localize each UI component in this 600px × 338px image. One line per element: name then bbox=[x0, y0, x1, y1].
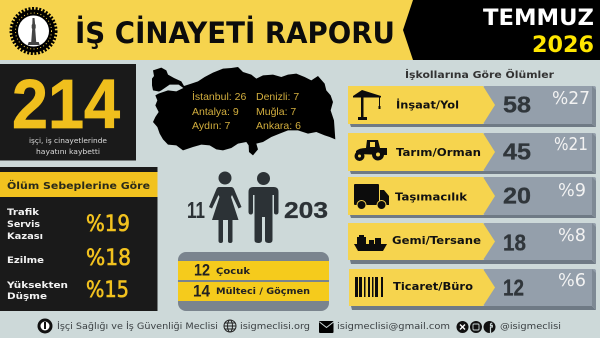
icon: mail bbox=[319, 321, 334, 333]
month: TEMMUZ bbox=[483, 6, 594, 31]
children row: 12 bbox=[194, 260, 210, 280]
province figures: Denizli: 7 bbox=[256, 91, 299, 103]
cause: crushing: %18 bbox=[86, 246, 131, 271]
total caption bbox=[29, 137, 107, 156]
cause: fall from height bbox=[6, 278, 129, 303]
sector row: construction: %27 bbox=[552, 88, 590, 109]
sector heading: İşkollarına Göre Ölümler bbox=[405, 70, 554, 81]
sector row: trade: 12 bbox=[503, 274, 524, 300]
cause: traffic: %19 bbox=[86, 212, 130, 237]
gender split bbox=[187, 172, 328, 243]
social handle: @isigmeclisi bbox=[500, 322, 561, 332]
cause: traffic: Trafik bbox=[7, 208, 39, 218]
province figures: Aydın: 7 bbox=[192, 120, 230, 132]
sector row: shipping bbox=[348, 223, 596, 264]
sector row: construction: 58 bbox=[503, 92, 531, 118]
sector row: agriculture: %21 bbox=[554, 134, 588, 155]
icon: truck bbox=[354, 184, 389, 210]
cause: crushing: Ezilme bbox=[7, 256, 44, 266]
province figures: Muğla: 7 bbox=[256, 106, 296, 118]
total caption: işçi, iş cinayetlerinde bbox=[29, 137, 107, 145]
total caption: hayatını kaybetti bbox=[36, 148, 100, 156]
organisation name: İşçi Sağlığı ve İş Güvenliği Meclisi bbox=[57, 321, 218, 332]
icon: globe bbox=[224, 320, 236, 332]
sector row: trade: Ticaret/Büro bbox=[393, 280, 473, 293]
cause: fall from height: %15 bbox=[86, 278, 129, 303]
children row: Çocuk bbox=[216, 267, 251, 277]
map silhouette bbox=[152, 67, 335, 155]
sector row: agriculture: 45 bbox=[503, 138, 531, 164]
website: isigmeclisi.org bbox=[240, 322, 310, 332]
province figures: İstanbul: 26 bbox=[192, 90, 246, 103]
email: isigmeclisi@gmail.com bbox=[337, 322, 450, 332]
province figures: Antalya: 9 bbox=[192, 106, 239, 118]
title: İŞ CİNAYETİ RAPORU bbox=[75, 16, 395, 50]
sector row: transport: %9 bbox=[558, 180, 586, 201]
icons: social media bbox=[456, 321, 496, 333]
sector row: shipping: 18 bbox=[503, 230, 526, 256]
map: Turkey with top provinces bbox=[152, 67, 335, 155]
province figures bbox=[192, 90, 301, 132]
panel: children and migrants bbox=[178, 252, 329, 311]
cause: fall from height: Yüksekten bbox=[6, 281, 68, 291]
sector row: trade: %6 bbox=[558, 270, 586, 291]
sector row: shipping: Gemi/Tersane bbox=[392, 234, 481, 247]
total number: 214 bbox=[12, 65, 120, 143]
migrants row: Mülteci / Göçmen bbox=[216, 287, 310, 297]
icon: ship bbox=[354, 235, 387, 251]
year: 2026 bbox=[532, 33, 594, 58]
cause: fall from height: Düşme bbox=[7, 292, 47, 302]
footer bbox=[38, 318, 561, 334]
female count: 11 bbox=[187, 197, 205, 223]
province figures: Ankara: 6 bbox=[256, 120, 301, 132]
panel: total deaths bbox=[0, 64, 136, 160]
icon: barcode bbox=[355, 277, 383, 297]
sector row: shipping: %8 bbox=[558, 225, 586, 246]
migrants row bbox=[178, 282, 329, 301]
sector row: transport: 20 bbox=[503, 182, 531, 208]
cause: traffic: Servis bbox=[7, 220, 40, 230]
header bar bbox=[0, 0, 600, 60]
cause: traffic: Kazası bbox=[7, 232, 43, 242]
logo bbox=[11, 8, 56, 54]
sector row: agriculture: Tarım/Orman bbox=[396, 146, 481, 159]
sector row: transport bbox=[348, 177, 596, 218]
sector row: trade bbox=[349, 269, 596, 310]
cause: traffic bbox=[7, 208, 130, 242]
causes heading: Ölüm Sebeplerine Göre bbox=[7, 178, 150, 192]
sector row: construction bbox=[348, 86, 596, 127]
icon: woman bbox=[209, 172, 242, 243]
icon: tractor bbox=[354, 140, 387, 161]
icon: crane bbox=[353, 90, 381, 120]
icon: man bbox=[248, 172, 278, 243]
male count: 203 bbox=[284, 197, 328, 223]
causes heading bbox=[0, 172, 158, 197]
icon: footer logo bbox=[38, 318, 52, 334]
migrants row: 14 bbox=[193, 282, 210, 300]
panel: causes of death bbox=[0, 167, 158, 311]
sector row: construction: İnşaat/Yol bbox=[396, 98, 459, 112]
sector row: agriculture bbox=[348, 133, 596, 174]
children row bbox=[178, 260, 329, 280]
cause: crushing bbox=[7, 246, 131, 271]
sector row: transport: Taşımacılık bbox=[395, 190, 468, 204]
